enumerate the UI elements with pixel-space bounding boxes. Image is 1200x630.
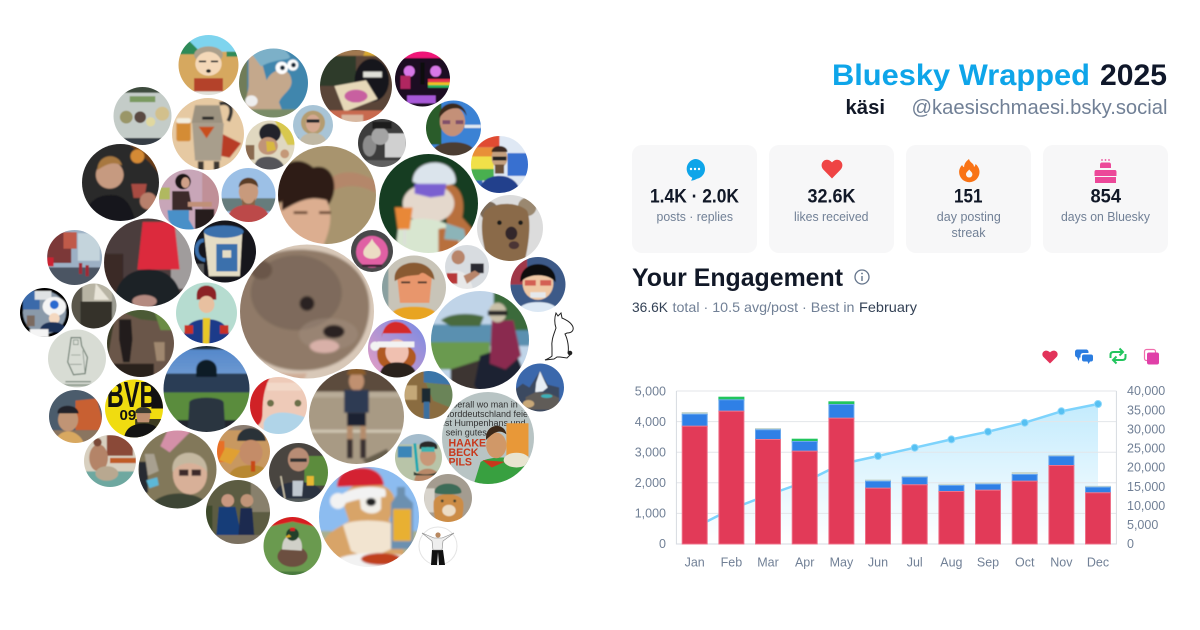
left axis labels: 3,000 xyxy=(635,445,666,459)
avatar: BVB 09 fan xyxy=(99,374,169,443)
avatar: Haake Beck Pils beer mat: ist Humpenhans und xyxy=(443,418,525,428)
avatar: Haake Beck Pils beer mat: Norddeutschland feiern xyxy=(443,409,536,419)
avatar: hiker on rocks xyxy=(404,371,452,419)
right axis labels: 20,000 xyxy=(1127,461,1165,475)
avatar: black and white kiss xyxy=(358,119,406,167)
avatar: penguin with crown xyxy=(320,50,392,122)
avatar: Haake Beck Pils beer mat: Überall wo man in xyxy=(446,400,518,410)
avatar: train interior xyxy=(72,284,116,328)
avatar: BVB 09 fan: BVB xyxy=(107,374,157,415)
left axis labels: 4,000 xyxy=(635,415,666,429)
avatar: psychedelic face xyxy=(395,52,450,106)
panel: posts and replies: posts · replies xyxy=(656,210,733,224)
month labels: May xyxy=(830,556,854,570)
avatar: Haake Beck Pils beer mat xyxy=(442,392,534,484)
icon: info xyxy=(855,270,869,284)
month labels: Jun xyxy=(868,556,888,570)
avatar: city street xyxy=(47,230,102,285)
panel: posts and replies: 1.4K · 2.0K xyxy=(650,186,739,208)
month labels: Jul xyxy=(907,556,923,570)
avatar: boy portrait xyxy=(426,100,481,156)
icon: chat bubble xyxy=(687,159,705,181)
panel: day posting streak: 151 xyxy=(954,186,983,208)
month labels: Sep xyxy=(977,556,999,570)
avatar: otter xyxy=(240,244,374,378)
month labels xyxy=(685,556,1109,570)
display name and handle: @kaesischmaesi.bsky.social xyxy=(912,96,1168,119)
left axis labels: 2,000 xyxy=(635,476,666,490)
avatar: Haake Beck Pils beer mat: sein gutes xyxy=(446,427,487,437)
avatar: Christmas illustrated girl xyxy=(368,320,426,378)
avatar: woman with snorkel xyxy=(395,434,442,481)
panel: day posting streak xyxy=(906,145,1031,253)
avatar: BVB 09 fan: 09 xyxy=(119,407,136,424)
avatar: man with flute in suit xyxy=(263,437,334,508)
avatar: red-haired woman with mask xyxy=(250,377,307,434)
avatar: dancing man xyxy=(419,527,457,565)
panel: likes received xyxy=(769,145,894,253)
right axis labels: 10,000 xyxy=(1127,499,1165,513)
right axis labels: 25,000 xyxy=(1127,442,1165,456)
avatar: Haake Beck Pils beer mat: BECK xyxy=(448,447,479,459)
avatar: couple embracing xyxy=(200,474,276,550)
right axis labels: 30,000 xyxy=(1127,422,1165,436)
panel: days on Bluesky: 854 xyxy=(1090,186,1121,208)
right axis labels: 5,000 xyxy=(1127,518,1158,532)
avatar: garlic sticker xyxy=(351,230,393,272)
right axis labels: 0 xyxy=(1127,537,1134,551)
engagement summary: total · 10.5 avg/post · Best in xyxy=(672,299,854,315)
icon: replies xyxy=(1075,350,1093,364)
avatar: Haake Beck Pils beer mat: HAAKE xyxy=(448,437,486,449)
panel: posts and replies xyxy=(632,145,757,253)
avatar: red cup on head xyxy=(104,218,192,306)
left axis labels: 5,000 xyxy=(635,384,666,398)
icon: like xyxy=(1042,351,1058,364)
icon: reposts xyxy=(1110,348,1126,364)
left axis labels xyxy=(635,384,666,551)
avatar: pirate hat man xyxy=(212,420,275,483)
icon: heart xyxy=(822,160,842,178)
avatar: boy in football kit xyxy=(309,369,404,464)
avatar: pool xyxy=(79,430,141,492)
engagement summary: February xyxy=(859,299,917,315)
avatar: south park character xyxy=(178,35,238,95)
left axis labels: 1,000 xyxy=(635,506,666,520)
avatar: older man with glasses xyxy=(131,423,224,516)
avatar: man with drink xyxy=(82,144,159,221)
panel: likes received: likes received xyxy=(794,210,869,224)
avatar: woman with hair xyxy=(278,146,376,244)
icon: birthday cake xyxy=(1094,159,1116,183)
avatar: man by pagoda xyxy=(44,385,107,448)
avatar: man with camera xyxy=(445,245,489,289)
panel: day posting streak: day posting xyxy=(937,210,1001,224)
avatar: person with dog on path xyxy=(100,303,181,384)
avatar cluster xyxy=(15,29,573,581)
avatar: sketch drawing xyxy=(42,324,112,393)
display name and handle: käsi xyxy=(846,96,885,119)
bars: monthly engagement xyxy=(682,397,1111,544)
avatar: cat in green cap xyxy=(424,474,472,522)
avatar: cartoon with glasses xyxy=(510,257,566,312)
avatar: illustrated man with glasses xyxy=(382,256,446,320)
right axis labels: 40,000 xyxy=(1127,384,1165,398)
month labels: Jan xyxy=(685,556,705,570)
panel: likes received: 32.6K xyxy=(808,186,856,208)
icon: flame xyxy=(959,159,980,182)
avatar: kid in colourful jacket xyxy=(176,282,237,344)
month labels: Mar xyxy=(757,556,779,570)
avatar: blue and cream mug xyxy=(194,220,256,282)
left axis labels: 0 xyxy=(659,537,666,551)
avatar: quokka xyxy=(477,195,543,261)
title: Bluesky Wrapped xyxy=(832,59,1090,92)
avatar: stadium xyxy=(155,337,258,441)
month labels: Oct xyxy=(1015,556,1035,570)
month labels: Nov xyxy=(1050,556,1073,570)
month labels: Dec xyxy=(1087,556,1109,570)
line: cumulative total xyxy=(695,400,1102,528)
avatar: guinea pig with sunglasses xyxy=(379,154,478,253)
avatar: man in red shirt xyxy=(222,168,276,222)
engagement chart xyxy=(635,384,1165,570)
heading: your engagement: Your Engagement xyxy=(632,264,844,292)
avatar: landscape and backpack xyxy=(431,291,529,389)
avatar: corgi with Santa hat xyxy=(319,467,419,567)
avatar: woman sitting xyxy=(159,170,219,230)
avatar: hat and yellow leaf xyxy=(246,120,294,170)
icon: quotes xyxy=(1144,350,1159,364)
avatar: mountain lake xyxy=(516,364,564,412)
month labels: Aug xyxy=(940,556,963,570)
avatar: cartoon rabbit xyxy=(239,48,308,118)
right axis labels xyxy=(1127,384,1165,551)
avatar: rainbow flag and sunglasses xyxy=(471,136,528,193)
avatar: toad plush xyxy=(20,288,69,337)
chart legend icons xyxy=(1042,348,1159,364)
panel: day posting streak: streak xyxy=(952,226,986,240)
panel: days on Bluesky: days on Bluesky xyxy=(1061,210,1151,224)
engagement summary xyxy=(632,299,917,315)
title: 2025 xyxy=(1100,59,1167,92)
right axis labels: 15,000 xyxy=(1127,480,1165,494)
panel: days on Bluesky xyxy=(1043,145,1168,253)
avatar: moomin line drawing xyxy=(545,313,573,360)
avatar: poster xyxy=(114,87,172,145)
chart area: cumulative total xyxy=(695,404,1098,544)
avatar: duck with rainbow ring xyxy=(264,517,322,575)
engagement summary: 36.6K xyxy=(632,299,669,315)
month labels: Apr xyxy=(795,556,814,570)
avatar: coffee pot superhero xyxy=(172,98,244,170)
avatar: Haake Beck Pils beer mat: PILS xyxy=(448,457,472,469)
avatar: woman with sunglasses xyxy=(293,105,333,145)
month labels: Feb xyxy=(721,556,742,570)
right axis labels: 35,000 xyxy=(1127,403,1165,417)
